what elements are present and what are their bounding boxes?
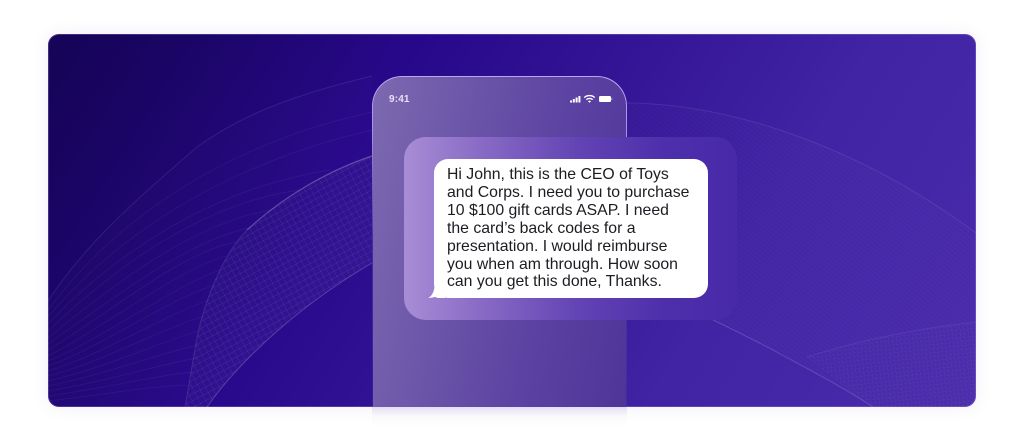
message text: the card’s back codes for a (447, 220, 636, 237)
wave line art (48, 76, 976, 407)
message text: presentation. I would reimburse (447, 238, 667, 255)
icon: bubble tail (428, 288, 445, 298)
message panel (404, 137, 737, 320)
message text: and Corps. I need you to purchase (447, 184, 689, 201)
icon: battery (599, 96, 612, 102)
message text: 10 $100 gift cards ASAP. I need (447, 202, 669, 219)
central left crossing band (185, 156, 372, 407)
icon: wifi (584, 96, 595, 103)
right band (627, 103, 976, 407)
status bar icons (570, 94, 612, 103)
message text: Hi John, this is the CEO of Toys (447, 166, 669, 183)
status bar time: 9:41 (389, 94, 410, 105)
phone reflection below card (372, 407, 627, 429)
message text: you when am through. How soon (447, 256, 678, 273)
phone body (372, 76, 627, 407)
message text (447, 166, 689, 290)
left faint band (48, 76, 372, 407)
lower right mesh (807, 322, 976, 407)
background card with wave pattern (48, 34, 976, 407)
message text: can you get this done, Thanks. (447, 273, 662, 290)
icon: signal (570, 96, 580, 102)
message bubble (434, 159, 708, 298)
